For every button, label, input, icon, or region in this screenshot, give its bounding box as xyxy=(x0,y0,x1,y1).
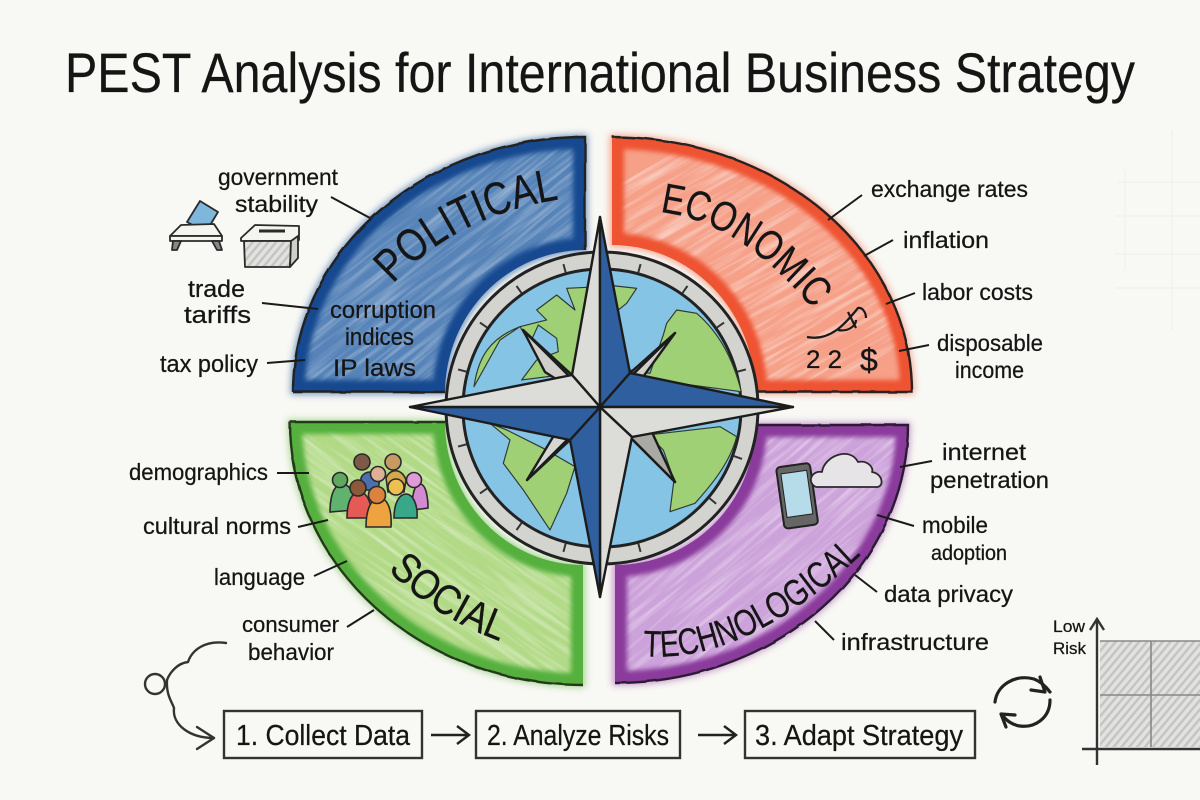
label: disposable income: disposable xyxy=(937,330,1043,356)
label: tax policy: tax policy xyxy=(160,351,258,378)
label: internet penetration: penetration xyxy=(930,467,1049,493)
step 2: analyze risks xyxy=(476,711,680,758)
label: consumer behavior: behavior xyxy=(248,639,334,665)
label: infrastructure: infrastructure xyxy=(841,629,989,655)
label: government stability: stability xyxy=(235,191,319,217)
panel: technological xyxy=(608,418,915,690)
arrow: step 1 to 2 xyxy=(431,726,469,744)
icon: currency chart: 2 2 xyxy=(806,346,842,374)
step 1: collect data xyxy=(224,711,422,758)
label: data privacy xyxy=(855,575,1014,607)
label: trade tariffs xyxy=(184,276,318,329)
label: trade tariffs: tariffs xyxy=(184,302,251,329)
step 3: adapt strategy xyxy=(745,711,975,758)
diagonal points xyxy=(523,330,675,482)
label: consumer behavior: consumer xyxy=(242,612,339,637)
step 3: adapt strategy: 3. Adapt Strategy xyxy=(755,720,963,752)
faint background grid xyxy=(1115,130,1200,330)
icon: smartphone xyxy=(776,463,818,529)
risk matrix xyxy=(1053,617,1200,765)
main points xyxy=(410,217,793,597)
heading: political: POLITICAL xyxy=(372,170,558,282)
matrix cells xyxy=(1100,641,1200,747)
label: government stability: government xyxy=(218,164,339,190)
icon: currency chart xyxy=(806,308,878,378)
label: corruption indices and IP laws: IP laws xyxy=(333,355,416,382)
label: consumer behavior xyxy=(242,610,374,665)
step 1: collect data: 1. Collect Data xyxy=(236,720,411,752)
heading: economic: ECONOMIC xyxy=(662,184,830,304)
low risk label: Risk xyxy=(1053,639,1086,658)
matrix axes xyxy=(1082,619,1200,765)
label: government stability xyxy=(218,164,370,218)
label: labor costs: labor costs xyxy=(922,279,1033,305)
label: inflation: inflation xyxy=(903,227,989,253)
label: language: language xyxy=(214,564,305,590)
label: mobile adoption: adoption xyxy=(931,542,1007,565)
label: corruption indices and IP laws: corruption xyxy=(330,297,436,324)
low risk label: Low xyxy=(1053,617,1086,636)
label: disposable income xyxy=(899,330,1043,383)
arrow: squiggle to collect data xyxy=(145,642,226,749)
icon: ballot box xyxy=(241,225,299,267)
compass ring xyxy=(446,252,758,564)
label: exchange rates xyxy=(828,176,1028,220)
label: mobile adoption: mobile xyxy=(922,512,988,538)
label: tax policy xyxy=(160,351,305,378)
label: internet penetration: internet xyxy=(942,439,1027,465)
heading: technological: TECHNOLOGICAL xyxy=(644,543,861,657)
label: language xyxy=(214,561,347,590)
compass star xyxy=(410,217,793,597)
label: corruption indices and IP laws xyxy=(330,297,436,382)
low risk label xyxy=(1053,617,1086,658)
label: exchange rates: exchange rates xyxy=(871,176,1028,202)
continents xyxy=(474,285,741,530)
label: internet penetration xyxy=(900,439,1049,493)
icon: cloud xyxy=(811,454,882,487)
panel: political xyxy=(286,130,592,400)
label: demographics: demographics xyxy=(129,459,268,485)
icon: cycle arrows xyxy=(995,677,1050,727)
step 2: analyze risks: 2. Analyze Risks xyxy=(487,720,669,752)
label: corruption indices and IP laws: indices xyxy=(345,324,414,351)
arrow: step 2 to 3 xyxy=(698,726,736,744)
icon: group of people xyxy=(330,454,428,527)
globe xyxy=(446,252,758,564)
label: data privacy: data privacy xyxy=(884,581,1014,607)
icon: currency chart: $ xyxy=(860,342,878,378)
panel: economic xyxy=(605,130,919,399)
label: inflation xyxy=(864,227,989,256)
heading: social: SOCIAL xyxy=(392,554,500,641)
label: cultural norms: cultural norms xyxy=(143,513,291,539)
label: infrastructure xyxy=(815,621,989,655)
panel: social xyxy=(283,415,590,692)
label: trade tariffs: trade xyxy=(188,276,245,303)
label: mobile adoption xyxy=(877,512,1007,565)
icon: ballot table xyxy=(170,201,222,250)
ring tick marks xyxy=(458,264,746,552)
label: disposable income: income xyxy=(955,357,1024,383)
